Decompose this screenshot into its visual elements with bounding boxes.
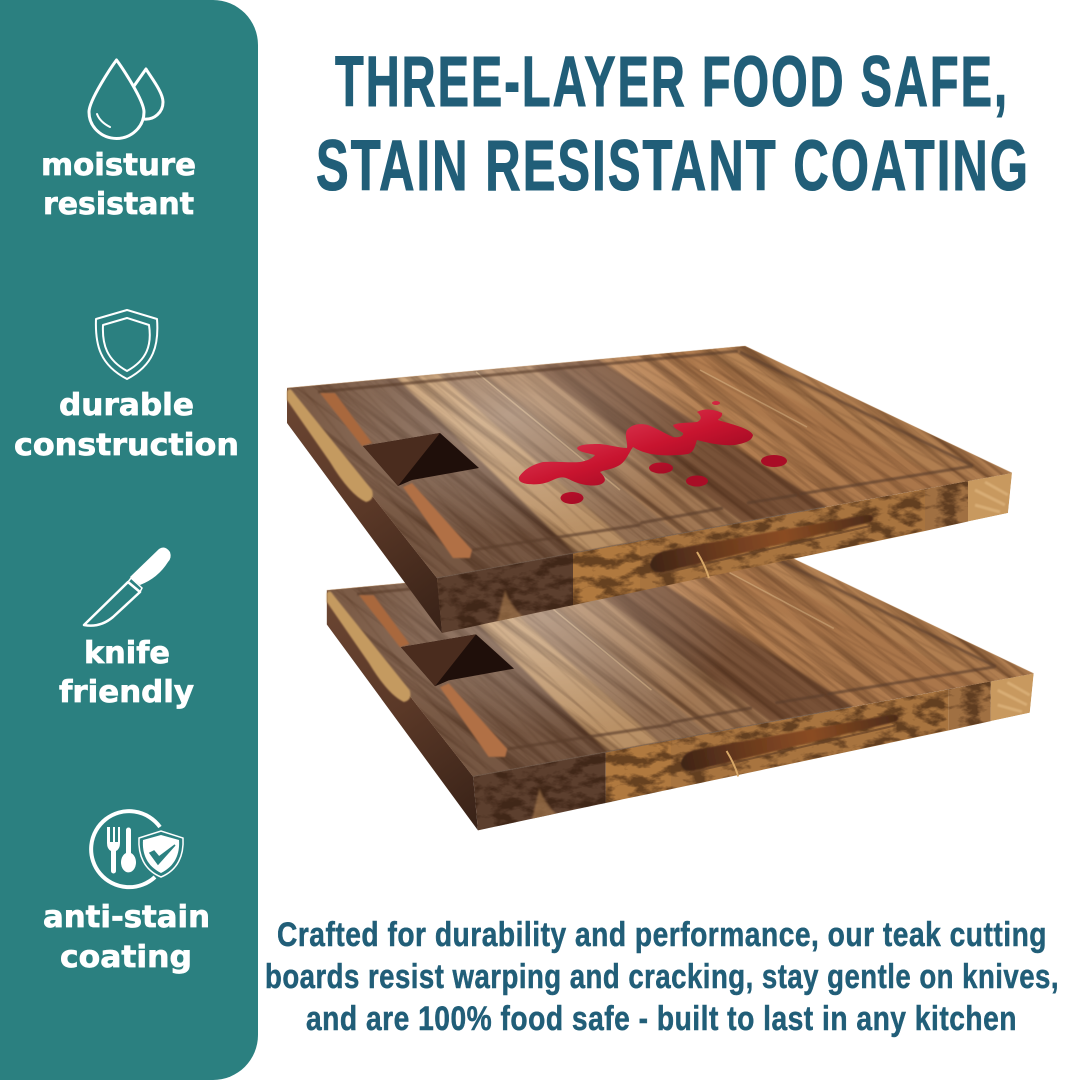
description text: [265, 916, 1059, 1038]
label: anti-stain coating: coating: [60, 940, 192, 975]
title: [316, 43, 1030, 206]
icon: knife: [84, 548, 171, 626]
icon: cutlery and shield: [91, 811, 183, 887]
drop: [686, 476, 708, 486]
icon: shield: [96, 310, 157, 379]
label: knife friendly: knife: [84, 636, 170, 671]
drop: [560, 492, 584, 504]
label: anti-stain coating: [43, 900, 210, 975]
label: knife friendly: friendly: [59, 675, 194, 710]
red liquid spill: [519, 401, 787, 504]
label: moisture resistant: resistant: [43, 187, 194, 222]
drop: [649, 462, 673, 474]
label: durable construction: construction: [14, 428, 239, 463]
label: moisture resistant: moisture: [41, 148, 196, 183]
label: anti-stain coating: anti-stain: [43, 900, 210, 935]
drop: [761, 455, 787, 467]
drop: [712, 401, 720, 405]
label: knife friendly: [59, 636, 194, 710]
lower cutting board: [202, 207, 1080, 1080]
icon: water drops: [89, 60, 163, 138]
panel: teal sidebar: [0, 0, 258, 1080]
label: moisture resistant: [41, 148, 196, 222]
label: durable construction: [14, 388, 239, 463]
label: durable construction: durable: [59, 388, 194, 423]
upper cutting board with stain: [159, 0, 1080, 923]
